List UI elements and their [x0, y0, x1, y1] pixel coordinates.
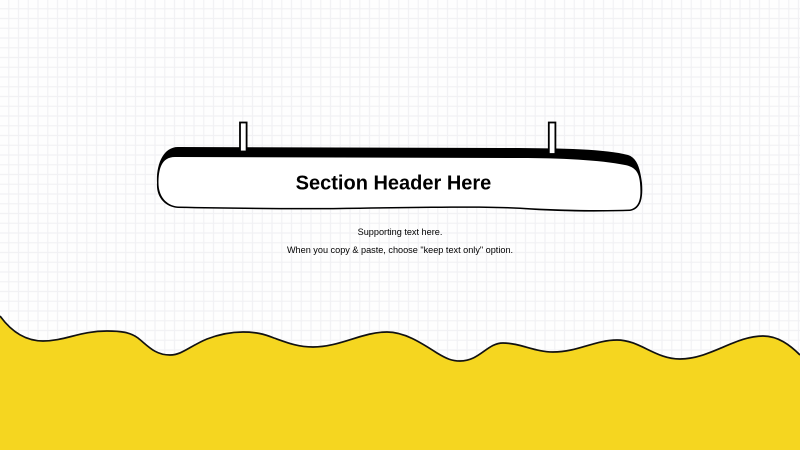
supporting line two: When you copy & paste, choose "keep text only" option. — [287, 245, 513, 255]
supporting text — [287, 227, 513, 255]
hanging sign banner — [157, 122, 642, 212]
right hanging tab — [549, 122, 555, 154]
supporting line one: Supporting text here. — [358, 227, 442, 237]
yellow wave — [0, 316, 800, 450]
left hanging tab — [240, 122, 247, 152]
banner white body — [158, 157, 640, 210]
section header title: Section Header Here — [296, 172, 491, 194]
banner black silhouette — [157, 147, 642, 212]
